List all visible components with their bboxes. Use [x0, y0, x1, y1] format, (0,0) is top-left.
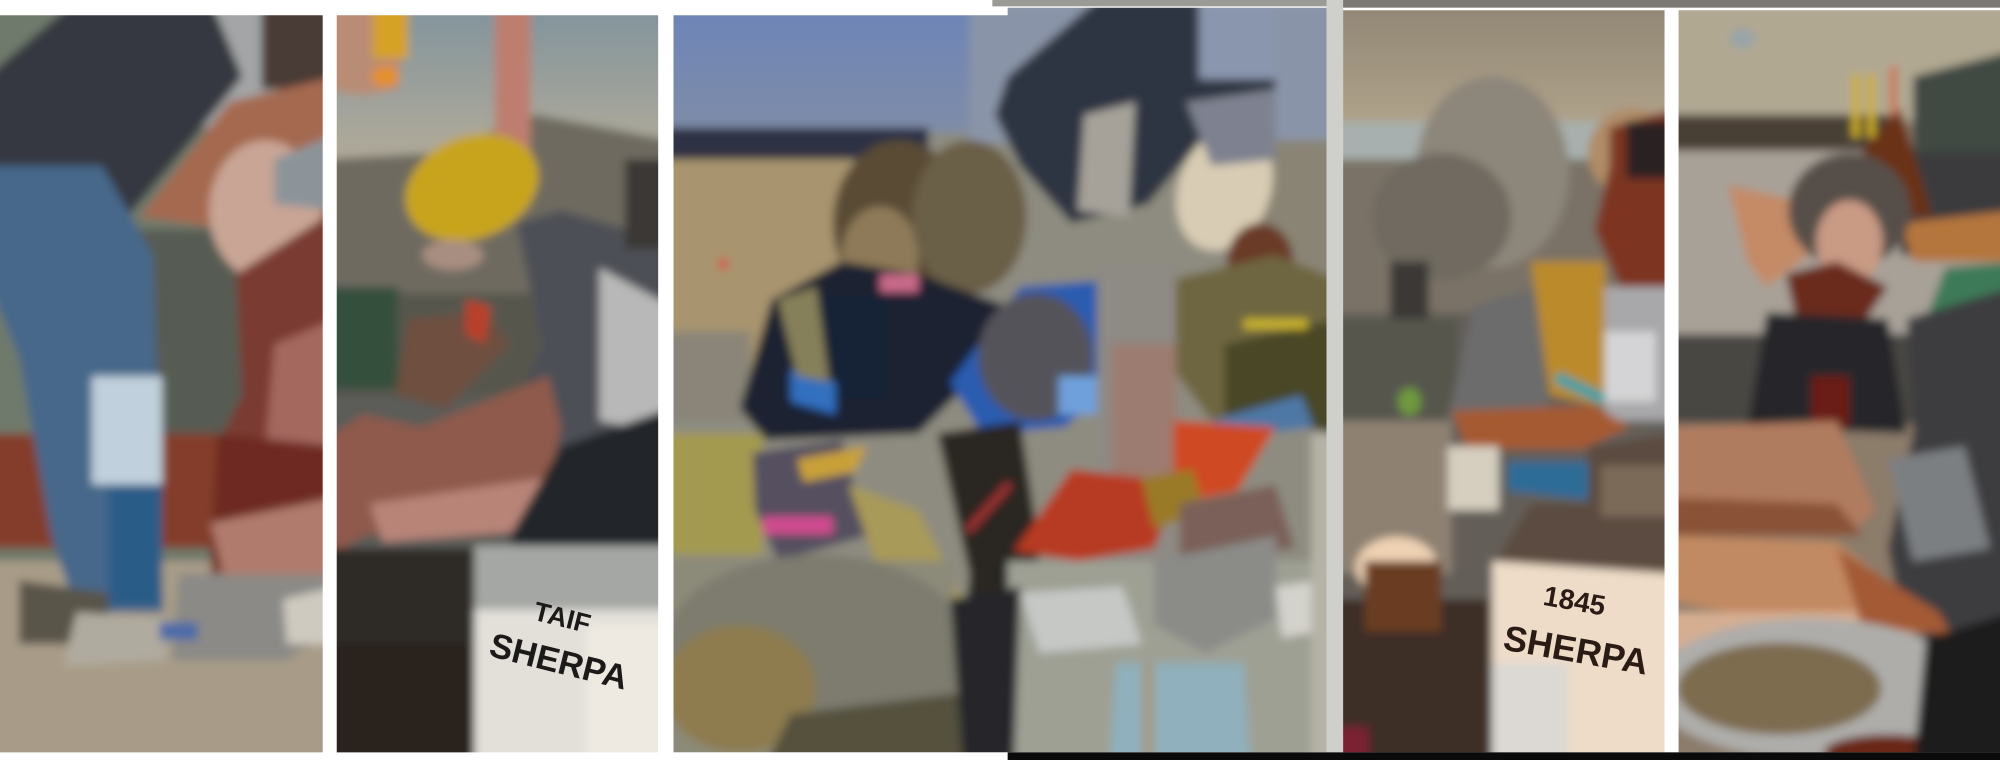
orange arm top	[336, 15, 404, 98]
green leaf	[1398, 388, 1421, 416]
jeans	[0, 166, 163, 612]
dark shelf band	[1666, 115, 1895, 153]
bucket text	[490, 602, 624, 690]
grey leg	[1097, 261, 1176, 587]
white cup	[1356, 537, 1438, 598]
cinder block	[1154, 536, 1276, 653]
tree right	[1266, 138, 1326, 275]
ground	[0, 561, 335, 760]
gutter strip	[1327, 0, 1343, 752]
candles and red hat	[1852, 74, 1860, 138]
panel: photo 2, yellow hard hat and white bucket	[324, 0, 671, 760]
black jacket	[1747, 312, 1907, 434]
wall	[1666, 150, 2000, 342]
child hair	[828, 136, 939, 286]
white shoes	[1020, 587, 1142, 653]
navy jacket	[740, 261, 1008, 440]
blue strap	[159, 622, 198, 640]
bucket text: SHERPA	[1500, 618, 1651, 683]
bucket text: 1845	[1541, 580, 1608, 621]
brown person	[210, 210, 335, 574]
red table	[0, 434, 217, 548]
large person jacket	[995, 0, 1276, 223]
person in grey jacket	[516, 209, 658, 447]
grey right edge	[1311, 434, 1339, 760]
large person in grey	[1888, 287, 2000, 760]
strip: top right dark	[1343, 0, 2000, 8]
brown arm	[140, 77, 335, 230]
dark counter	[1666, 334, 2000, 423]
camouflage person	[1167, 255, 1339, 421]
white shoe	[283, 587, 335, 644]
panel: photo 1, workers at a cinder block	[0, 0, 335, 760]
ground	[661, 561, 954, 760]
yellow mud bucket left	[661, 434, 763, 555]
blue sky	[674, 15, 974, 137]
yellow vest	[1531, 261, 1610, 408]
dark trousers	[938, 421, 1040, 760]
orange scarf right	[1901, 210, 2000, 261]
bare tree	[1416, 77, 1569, 268]
white bucket	[1492, 561, 1677, 760]
panel: photo 5, woman working with mud at the table	[1652, 0, 2000, 760]
black jacket lower	[508, 407, 658, 548]
top right background	[198, 15, 280, 132]
dark hands	[1492, 434, 1677, 574]
pink post	[495, 0, 531, 156]
face	[1816, 200, 1883, 284]
background silhouettes	[1390, 261, 1429, 357]
bucket text: SHERPA	[486, 627, 632, 697]
green jacket	[1926, 261, 2000, 357]
dark trousers lower	[950, 587, 1020, 760]
hands and mud	[1666, 421, 1875, 536]
grey jacket	[1448, 287, 1550, 421]
bowl	[1666, 612, 1857, 650]
orange arm	[1452, 406, 1630, 449]
white arm sleeve	[1078, 102, 1135, 217]
orange person head	[1594, 108, 1677, 291]
hair	[1788, 153, 1911, 268]
cinder block	[172, 574, 335, 661]
white bucket	[465, 603, 658, 752]
green foliage	[324, 287, 398, 389]
blue vest	[950, 281, 1110, 434]
dark horizon band	[661, 128, 929, 161]
dark tarp	[336, 544, 476, 650]
trees	[324, 115, 671, 293]
hard hat	[209, 140, 321, 281]
background greenery	[128, 230, 242, 446]
bucket text	[1500, 575, 1659, 683]
dark ground	[1330, 599, 1490, 760]
strip: top of photo 3	[992, 0, 1343, 6]
red face	[1222, 219, 1297, 272]
white jacket	[1605, 287, 1677, 421]
red orange gloves	[1173, 421, 1276, 504]
pale patch	[92, 376, 162, 485]
bucket text: TAIF	[531, 596, 594, 639]
red neck scarf	[466, 300, 491, 344]
shoes	[19, 580, 108, 644]
red bottom object	[1824, 734, 1952, 760]
teal strap	[1553, 372, 1607, 405]
yellow bucket	[848, 485, 963, 612]
tan wall	[674, 152, 858, 367]
dark jacket	[0, 0, 242, 217]
blue glove	[1508, 462, 1588, 500]
blue painted ground	[1110, 663, 1250, 760]
brown arms and hands	[324, 376, 561, 561]
colourful gloves	[753, 440, 867, 561]
white helmet	[1170, 138, 1279, 256]
dark top right	[1913, 51, 2000, 166]
yellow helmet	[399, 128, 545, 246]
panel: photo 4, workers with sepia sky	[1330, 0, 1677, 760]
scarf	[1786, 261, 1888, 332]
muddy bowl	[663, 555, 969, 746]
strip: bottom black edge	[1008, 752, 2000, 760]
speckled mud	[1330, 421, 1452, 574]
panel: photo 3, large worker group with orange gloves	[661, 0, 1339, 760]
